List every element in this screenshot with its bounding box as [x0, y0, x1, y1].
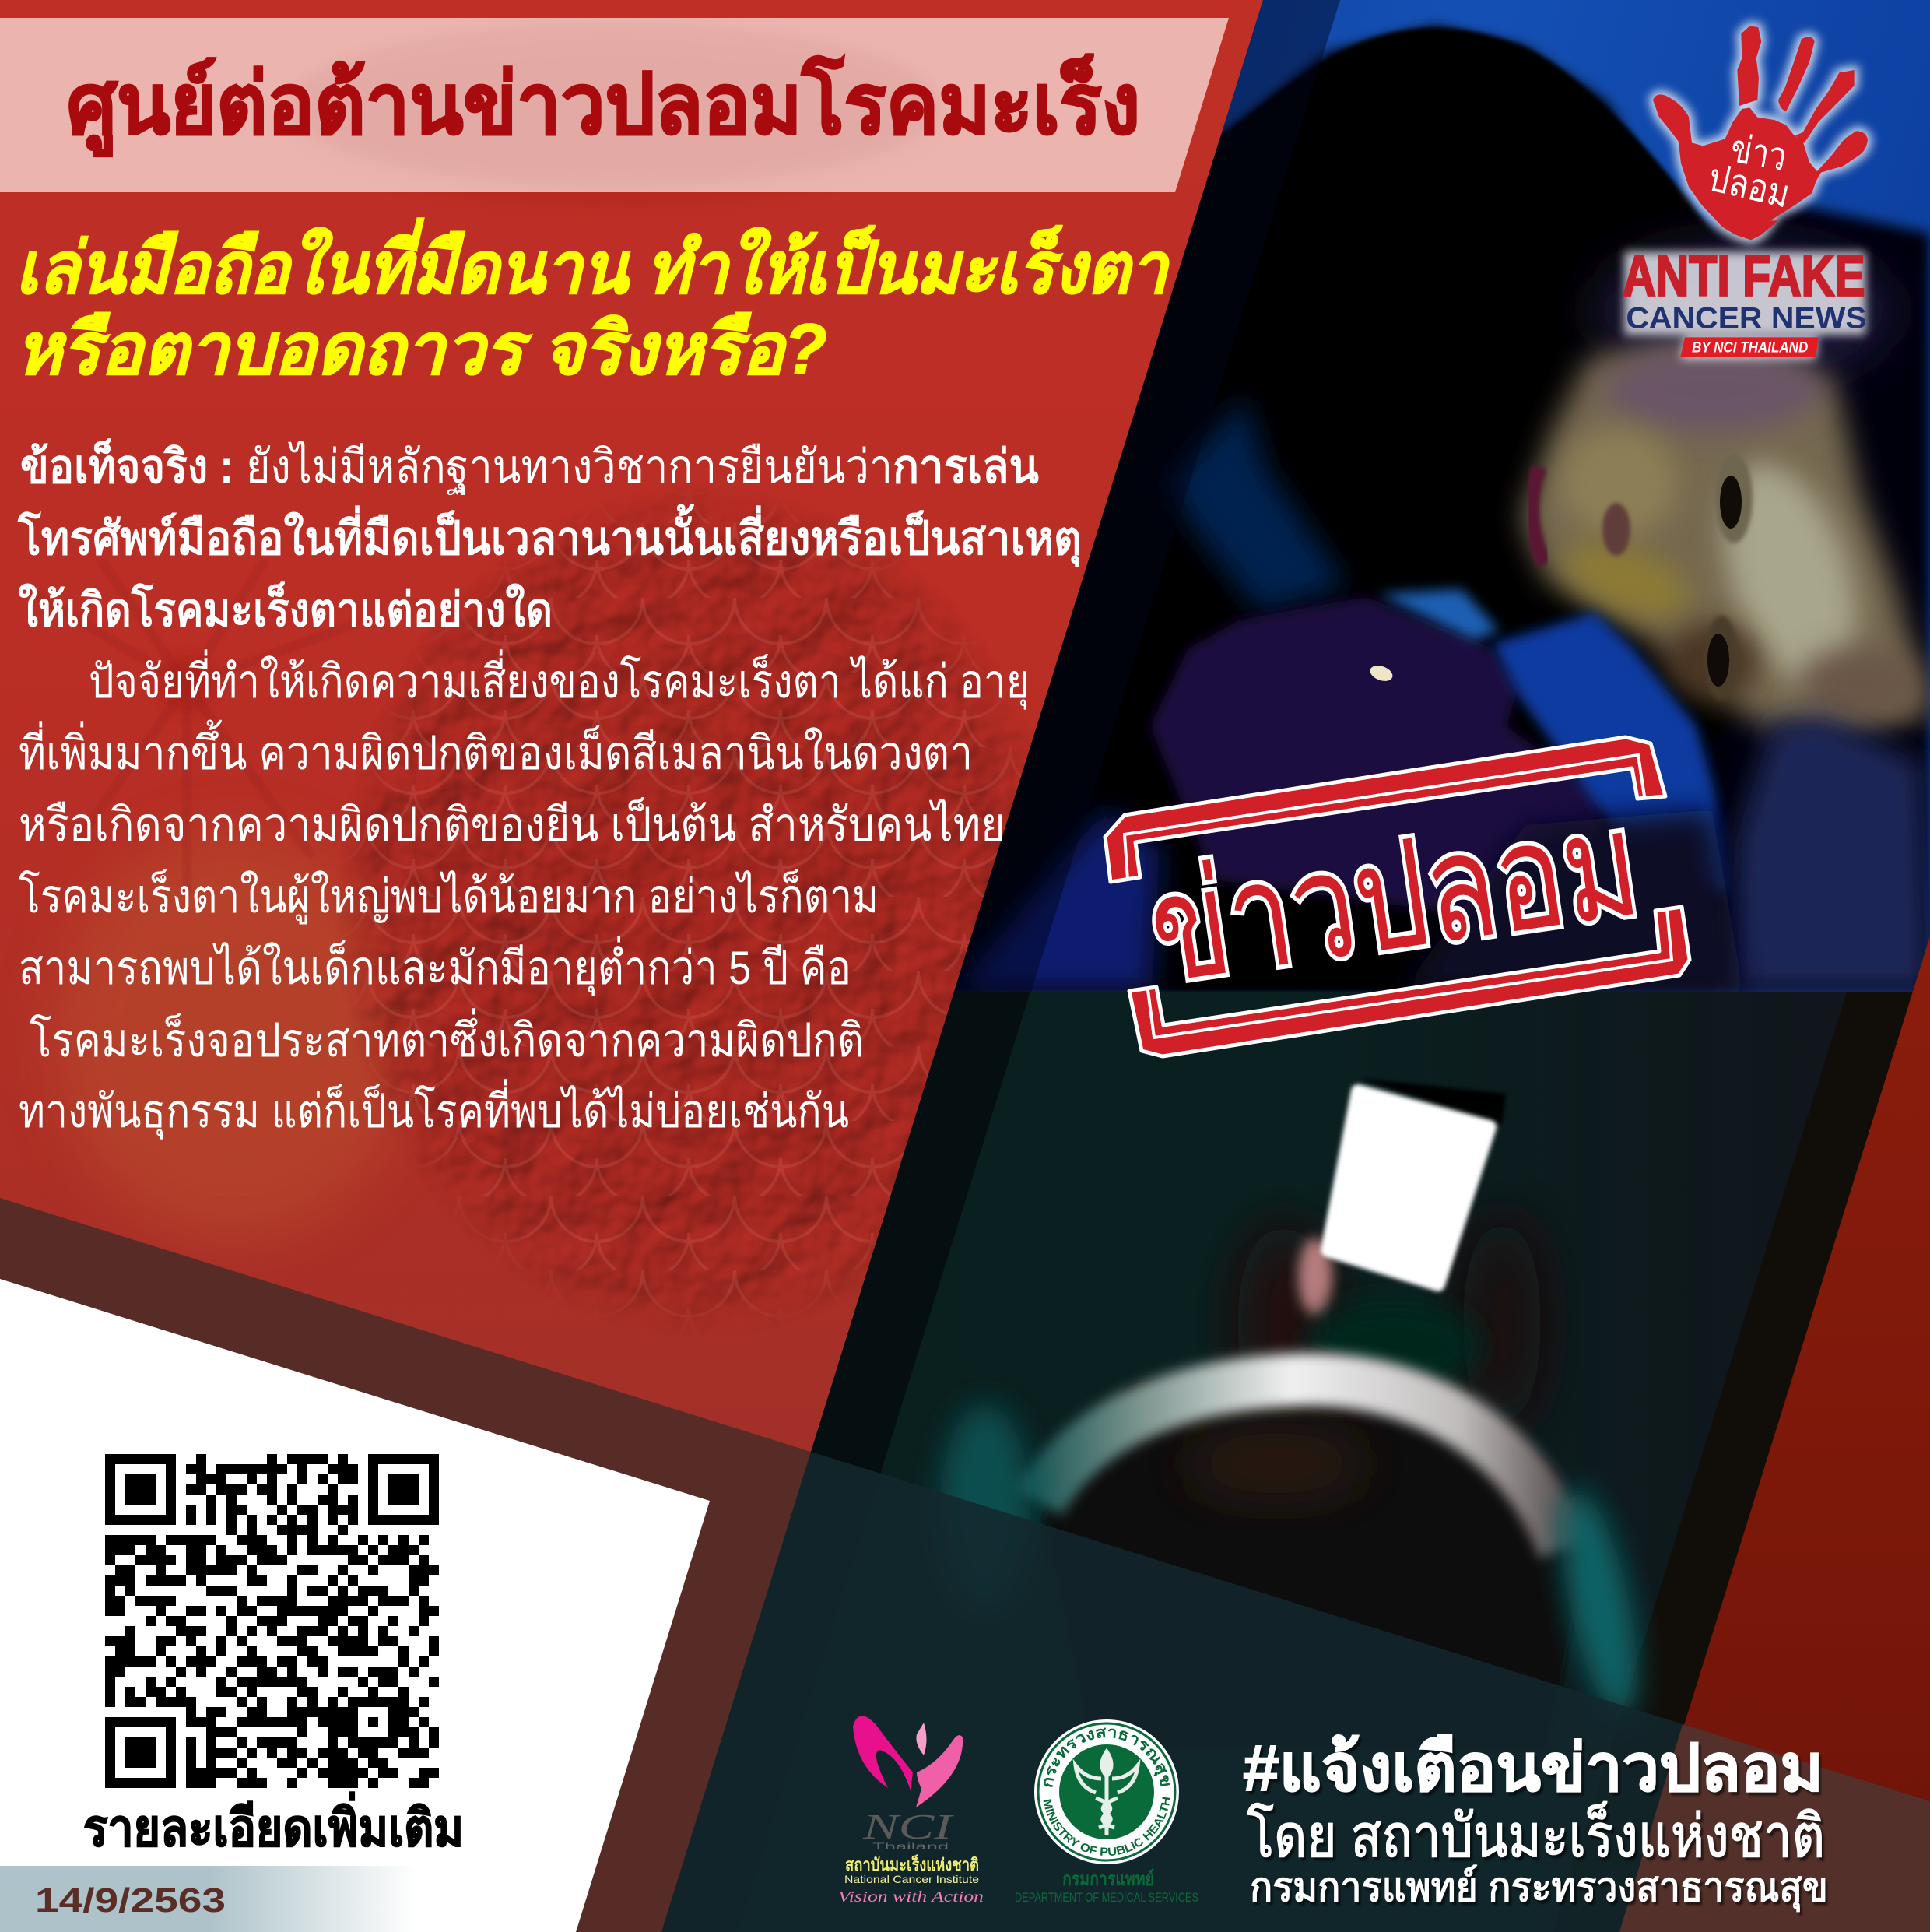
- body text: fact check: ทางพันธุกรรม แต่ก็เป็นโรคที่พบได้ไม่บ่อยเช่นกัน: [19, 1079, 849, 1140]
- header band: [0, 18, 1229, 192]
- body text: fact check: ยังไม่มีหลักฐานทางวิชาการยืนยันว่า: [246, 440, 893, 495]
- logo: national cancer institute: Thailand: [872, 1841, 949, 1852]
- body text: fact check: โรคมะเร็งตาในผู้ใหญ่พบได้น้อยมาก อย่างไรก็ตาม: [19, 869, 879, 925]
- stamp text: ข่าวปลอม: [1140, 781, 1648, 1014]
- photo: girl looking at phone in dark: [934, 0, 1930, 992]
- logo wordmark: [1623, 244, 1867, 360]
- panel: white QR panel: [0, 1279, 710, 1932]
- photo: phone glow in the dark bedroom: [661, 992, 1930, 1932]
- title: ศูนย์ต่อต้านข่าวปลอมโรคมะเร็ง: [67, 54, 1140, 156]
- icon: pink butterfly: [853, 1716, 963, 1807]
- logo: ministry of public health seal: [1015, 1719, 1198, 1905]
- overlay: right red band: [1619, 936, 1930, 1932]
- logo wordmark: CANCER NEWS: [1626, 301, 1867, 335]
- overlay: teal diagonal band on photo: [661, 1452, 1683, 1932]
- footer: warning hashtag and source: กรมการแพทย์ กระทรวงสาธารณสุข: [1250, 1864, 1828, 1913]
- body text: fact check: สามารถพบได้ในเด็กและมักมีอายุต่ำกว่า 5 ปี คือ: [19, 936, 851, 996]
- stamp top bracket: [1105, 737, 1665, 882]
- footer: warning hashtag and source: [1243, 1731, 1828, 1913]
- logo: national cancer institute: Vision with Action: [838, 1888, 984, 1906]
- body text: fact check: [17, 438, 1082, 1140]
- yellow question heading: หรือตาบอดถาวร จริงหรือ?: [16, 310, 827, 389]
- overlay: dark brown diagonal band: [0, 1198, 811, 1932]
- icon: red hand: ข่าว: [1728, 126, 1790, 179]
- overlay: brown diagonal band on right: [1619, 1724, 1930, 1932]
- logo: ministry of public health seal: กรมการแพทย์: [1062, 1868, 1154, 1890]
- icon: red hand: ปลอม: [1704, 155, 1794, 216]
- icon: red hand: [1653, 26, 1868, 240]
- footer: warning hashtag and source: #แจ้งเตือนข่าวปลอม: [1243, 1731, 1823, 1804]
- logo: ministry of public health seal: MINISTRY OF PUBLIC HEALTH: [1043, 1797, 1170, 1856]
- QR caption: รายละเอียดเพิ่มเติม: [83, 1791, 464, 1856]
- logo: ministry of public health seal: กระทรวงสาธารณสุข: [1044, 1728, 1170, 1787]
- footer: warning hashtag and source: โดย สถาบันมะเร็งแห่งชาติ: [1247, 1801, 1825, 1870]
- stamp bottom bracket: [1129, 907, 1690, 1056]
- logo: ministry of public health seal: DEPARTMENT OF MEDICAL SERVICES: [1015, 1890, 1198, 1905]
- body text: fact check: ที่เพิ่มมากขึ้น ความผิดปกติของเม็ดสีเมลานินในดวงตา: [19, 719, 973, 779]
- body text: fact check: ปัจจัยที่ทำให้เกิดความเสี่ยงของโรคมะเร็งตา ได้แก่ อายุ: [89, 649, 1030, 710]
- date text: 14/9/2563: [35, 1881, 226, 1920]
- body text: fact check: หรือเกิดจากความผิดปกติของยีน เป็นต้น สำหรับคนไทย: [19, 797, 1005, 851]
- logo: national cancer institute: NCI: [862, 1807, 955, 1846]
- icon: caduceus emblem: [1076, 1751, 1138, 1835]
- body text: fact check: ข้อเท็จจริง :: [20, 438, 233, 493]
- logo: anti fake cancer news: [1623, 26, 1868, 360]
- body text: fact check: โรคมะเร็งจอประสาทตาซึ่งเกิดจากความผิดปกติ: [30, 1008, 864, 1066]
- stamp: fake news: [1105, 737, 1690, 1056]
- body text: fact check: โทรศัพท์มือถือในที่มืดเป็นเวลานานนั้นเสี่ยงหรือเป็นสาเหตุ: [17, 504, 1082, 567]
- logo wordmark: BY NCI THAILAND: [1692, 340, 1808, 357]
- yellow question heading: [16, 217, 1170, 389]
- logo: national cancer institute: National Cancer Institute: [844, 1873, 979, 1885]
- body text: fact check: ให้เกิดโรคมะเร็งตาแต่อย่างใด: [18, 581, 553, 636]
- logo wordmark: ANTI FAKE: [1623, 244, 1865, 307]
- logo: national cancer institute: [838, 1716, 984, 1906]
- body text: fact check: การเล่น: [893, 441, 1039, 493]
- date strip: [0, 1866, 416, 1932]
- panel: red background with cancer cell: [0, 0, 1263, 1932]
- logo: national cancer institute: สถาบันมะเร็งแห่งชาติ: [845, 1853, 979, 1874]
- QR code: [105, 1454, 439, 1788]
- yellow question heading: เล่นมือถือในที่มืดนาน ทำให้เป็นมะเร็งตา: [16, 217, 1170, 308]
